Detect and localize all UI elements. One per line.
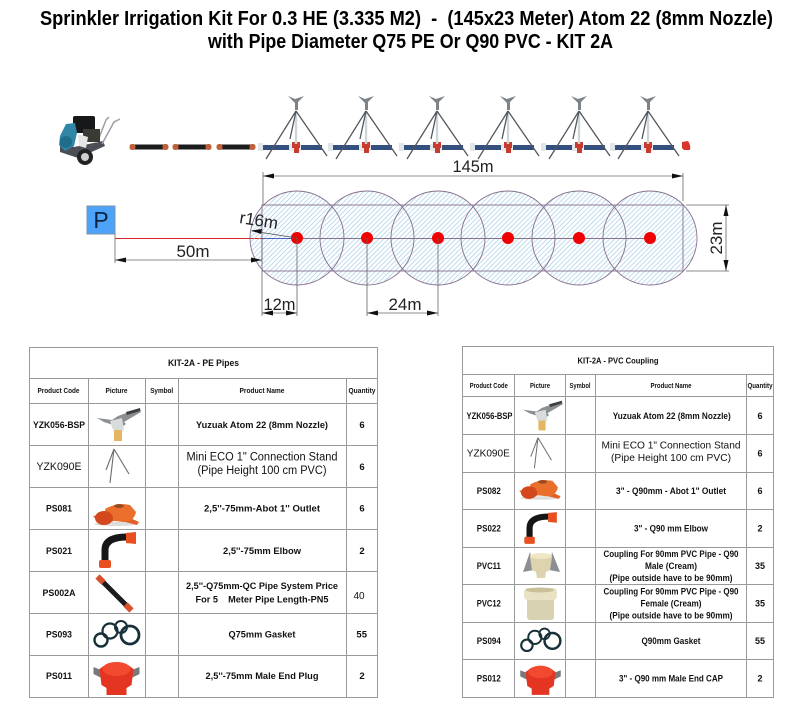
row: PVC12: PVC12 <box>477 599 501 609</box>
irrigated zone <box>250 191 697 285</box>
dimension 23m <box>686 205 729 271</box>
row: PVC11 <box>477 549 765 583</box>
column headers: Symbol <box>570 383 591 390</box>
row: PVC12: Female (Cream) <box>640 599 702 609</box>
row: PS002A: 2,5''-Q75mm-QC Pipe System Price <box>186 581 338 592</box>
row: PS022: PS022 <box>477 524 501 534</box>
row: PS081 <box>46 504 365 526</box>
dimension r16m <box>238 208 297 238</box>
row: PS094 <box>477 629 765 651</box>
row: PVC11: PVC11 <box>477 561 501 571</box>
dimension 12m <box>262 238 297 316</box>
row: PS022: 3" - Q90 mm Elbow <box>634 524 709 534</box>
row: PVC11: Coupling For 90mm PVC Pipe - Q90 <box>604 549 738 559</box>
row: PS093: 55 <box>356 630 368 641</box>
row: PS011: 2 <box>359 671 365 682</box>
supply line <box>115 238 262 240</box>
row: PS011: PS011 <box>46 671 73 682</box>
row: PS093: Q75mm Gasket <box>228 630 296 641</box>
column headers <box>38 386 376 395</box>
row: PS093: PS093 <box>46 630 72 641</box>
row: PS022: 2 <box>757 524 763 534</box>
row: PS094: Q90mm Gasket <box>642 636 700 646</box>
table heading: KIT-2A - PVC Coupling <box>578 356 658 366</box>
column headers: Quantity <box>348 386 376 395</box>
icon: sprinkler riser 4 <box>470 96 539 159</box>
row: PS081: 6 <box>359 504 365 514</box>
row: PS012: 2 <box>757 674 763 684</box>
row: PS011: 2,5''-75mm Male End Plug <box>206 671 319 682</box>
row: YZK090E: YZK090E <box>467 448 510 460</box>
row: YZK090E: (Pipe Height 100 cm PVC) <box>611 452 731 464</box>
icon: end plug <box>682 141 690 150</box>
row: PS002A: 40 <box>353 591 365 602</box>
icon: motor pump on trolley <box>59 116 120 165</box>
row: PS011 <box>46 662 365 695</box>
icon: sprinkler riser 3 <box>399 96 468 159</box>
row: YZK090E: Mini ECO 1" Connection Stand <box>602 440 741 452</box>
panel: PVC coupling table <box>462 346 774 698</box>
column headers: Symbol <box>150 386 173 395</box>
row: YZK090E <box>467 438 763 468</box>
layout diagram <box>87 157 729 316</box>
icon: male cream coupling <box>523 552 560 578</box>
row: YZK056-BSP: YZK056-BSP <box>33 420 86 431</box>
row: YZK090E <box>36 449 365 483</box>
row: YZK090E: 6 <box>757 449 763 459</box>
row: YZK056-BSP: 6 <box>359 420 365 431</box>
sprinkler positions <box>291 232 656 244</box>
row: PS081: PS081 <box>46 504 73 514</box>
icon: sprinkler riser 6 <box>610 96 679 159</box>
row: PS021 <box>46 532 365 568</box>
column headers: Product Name <box>240 386 284 395</box>
row: YZK056-BSP: 6 <box>757 411 763 421</box>
pump box P <box>87 206 115 234</box>
row: YZK090E: YZK090E <box>36 461 82 473</box>
row: YZK056-BSP: Yuzuak Atom 22 (8mm Nozzle) <box>196 420 328 431</box>
row: PVC12: (Pipe outside have to be 90mm) <box>610 611 733 621</box>
dimension 24m <box>367 238 438 316</box>
icon: female cream coupling <box>524 588 557 620</box>
dimension 145m: 145m <box>452 157 494 176</box>
row: PVC12 <box>477 587 765 621</box>
row: YZK056-BSP: Yuzuak Atom 22 (8mm Nozzle) <box>613 411 731 421</box>
row: PS012 <box>477 666 763 695</box>
row: YZK090E: (Pipe Height 100 cm PVC) <box>198 465 327 477</box>
title <box>40 8 773 53</box>
icon: hose pipe 2 <box>172 144 212 150</box>
icon: sprinkler riser 1 <box>258 96 327 159</box>
column headers: Product Code <box>470 383 508 390</box>
row: PS082: PS082 <box>477 486 501 496</box>
row: PS093 <box>46 621 368 646</box>
table heading: KIT-2A - PE Pipes <box>168 358 239 368</box>
row: PS012: PS012 <box>477 674 501 684</box>
row: YZK056-BSP <box>33 408 365 441</box>
row: PS002A <box>42 576 365 610</box>
table grid <box>30 348 378 698</box>
dimension 50m <box>115 234 262 263</box>
column headers: Picture <box>106 386 128 395</box>
dimension r16m: r16m <box>238 208 279 233</box>
row: PVC12: Coupling For 90mm PVC Pipe - Q90 <box>604 587 738 597</box>
panel: PE pipes table <box>30 348 378 698</box>
row: PS021: 2,5''-75mm Elbow <box>223 546 302 557</box>
row: PVC11: (Pipe outside have to be 90mm) <box>610 573 733 583</box>
row: YZK056-BSP: YZK056-BSP <box>466 411 512 421</box>
row: YZK090E: Mini ECO 1" Connection Stand <box>186 452 338 464</box>
dimension 145m <box>263 157 683 205</box>
row: PS094: 55 <box>755 636 765 646</box>
column headers: Product Code <box>38 386 80 395</box>
dimension 23m: 23m <box>707 221 726 255</box>
icon: hose pipe 3 <box>216 144 256 150</box>
column headers: Product Name <box>650 383 692 390</box>
row: PS012: 3" - Q90 mm Male End CAP <box>619 674 723 684</box>
table grid <box>462 346 774 698</box>
pump box P: P <box>93 207 109 233</box>
row: PS081: 2,5''-75mm-Abot 1'' Outlet <box>204 504 321 514</box>
column headers <box>470 383 773 390</box>
row: PS021: 2 <box>359 546 365 557</box>
row: PVC11: Male (Cream) <box>645 561 697 571</box>
row: PVC11: 35 <box>755 561 765 571</box>
row: YZK056-BSP <box>466 401 763 430</box>
equipment line: pump, pipes and sprinklers <box>59 96 690 165</box>
title: with Pipe Diameter Q75 PE Or Q90 PVC - KIT 2A <box>207 31 613 53</box>
icon: sprinkler riser 5 <box>541 96 610 159</box>
row: PS082 <box>477 480 763 500</box>
dimension 50m: 50m <box>176 242 210 261</box>
row: PVC12: 35 <box>755 599 765 609</box>
column headers: Quantity <box>748 383 773 390</box>
row: PS021: PS021 <box>46 546 73 557</box>
column headers: Picture <box>530 383 550 390</box>
dimension 24m: 24m <box>388 295 422 314</box>
row: YZK090E: 6 <box>359 462 365 473</box>
row: PS082: 3" - Q90mm - Abot 1" Outlet <box>616 486 726 496</box>
row: PS094: PS094 <box>477 636 501 646</box>
dimension 12m: 12m <box>264 295 296 314</box>
row: PS002A: For 5 Meter Pipe Length-PN5 <box>196 595 329 606</box>
row: PS002A: PS002A <box>42 588 76 599</box>
row: PS022 <box>477 512 763 544</box>
icon: sprinkler riser 2 <box>328 96 397 159</box>
row: PS082: 6 <box>757 486 763 496</box>
icon: hose pipe 1 <box>130 144 168 150</box>
